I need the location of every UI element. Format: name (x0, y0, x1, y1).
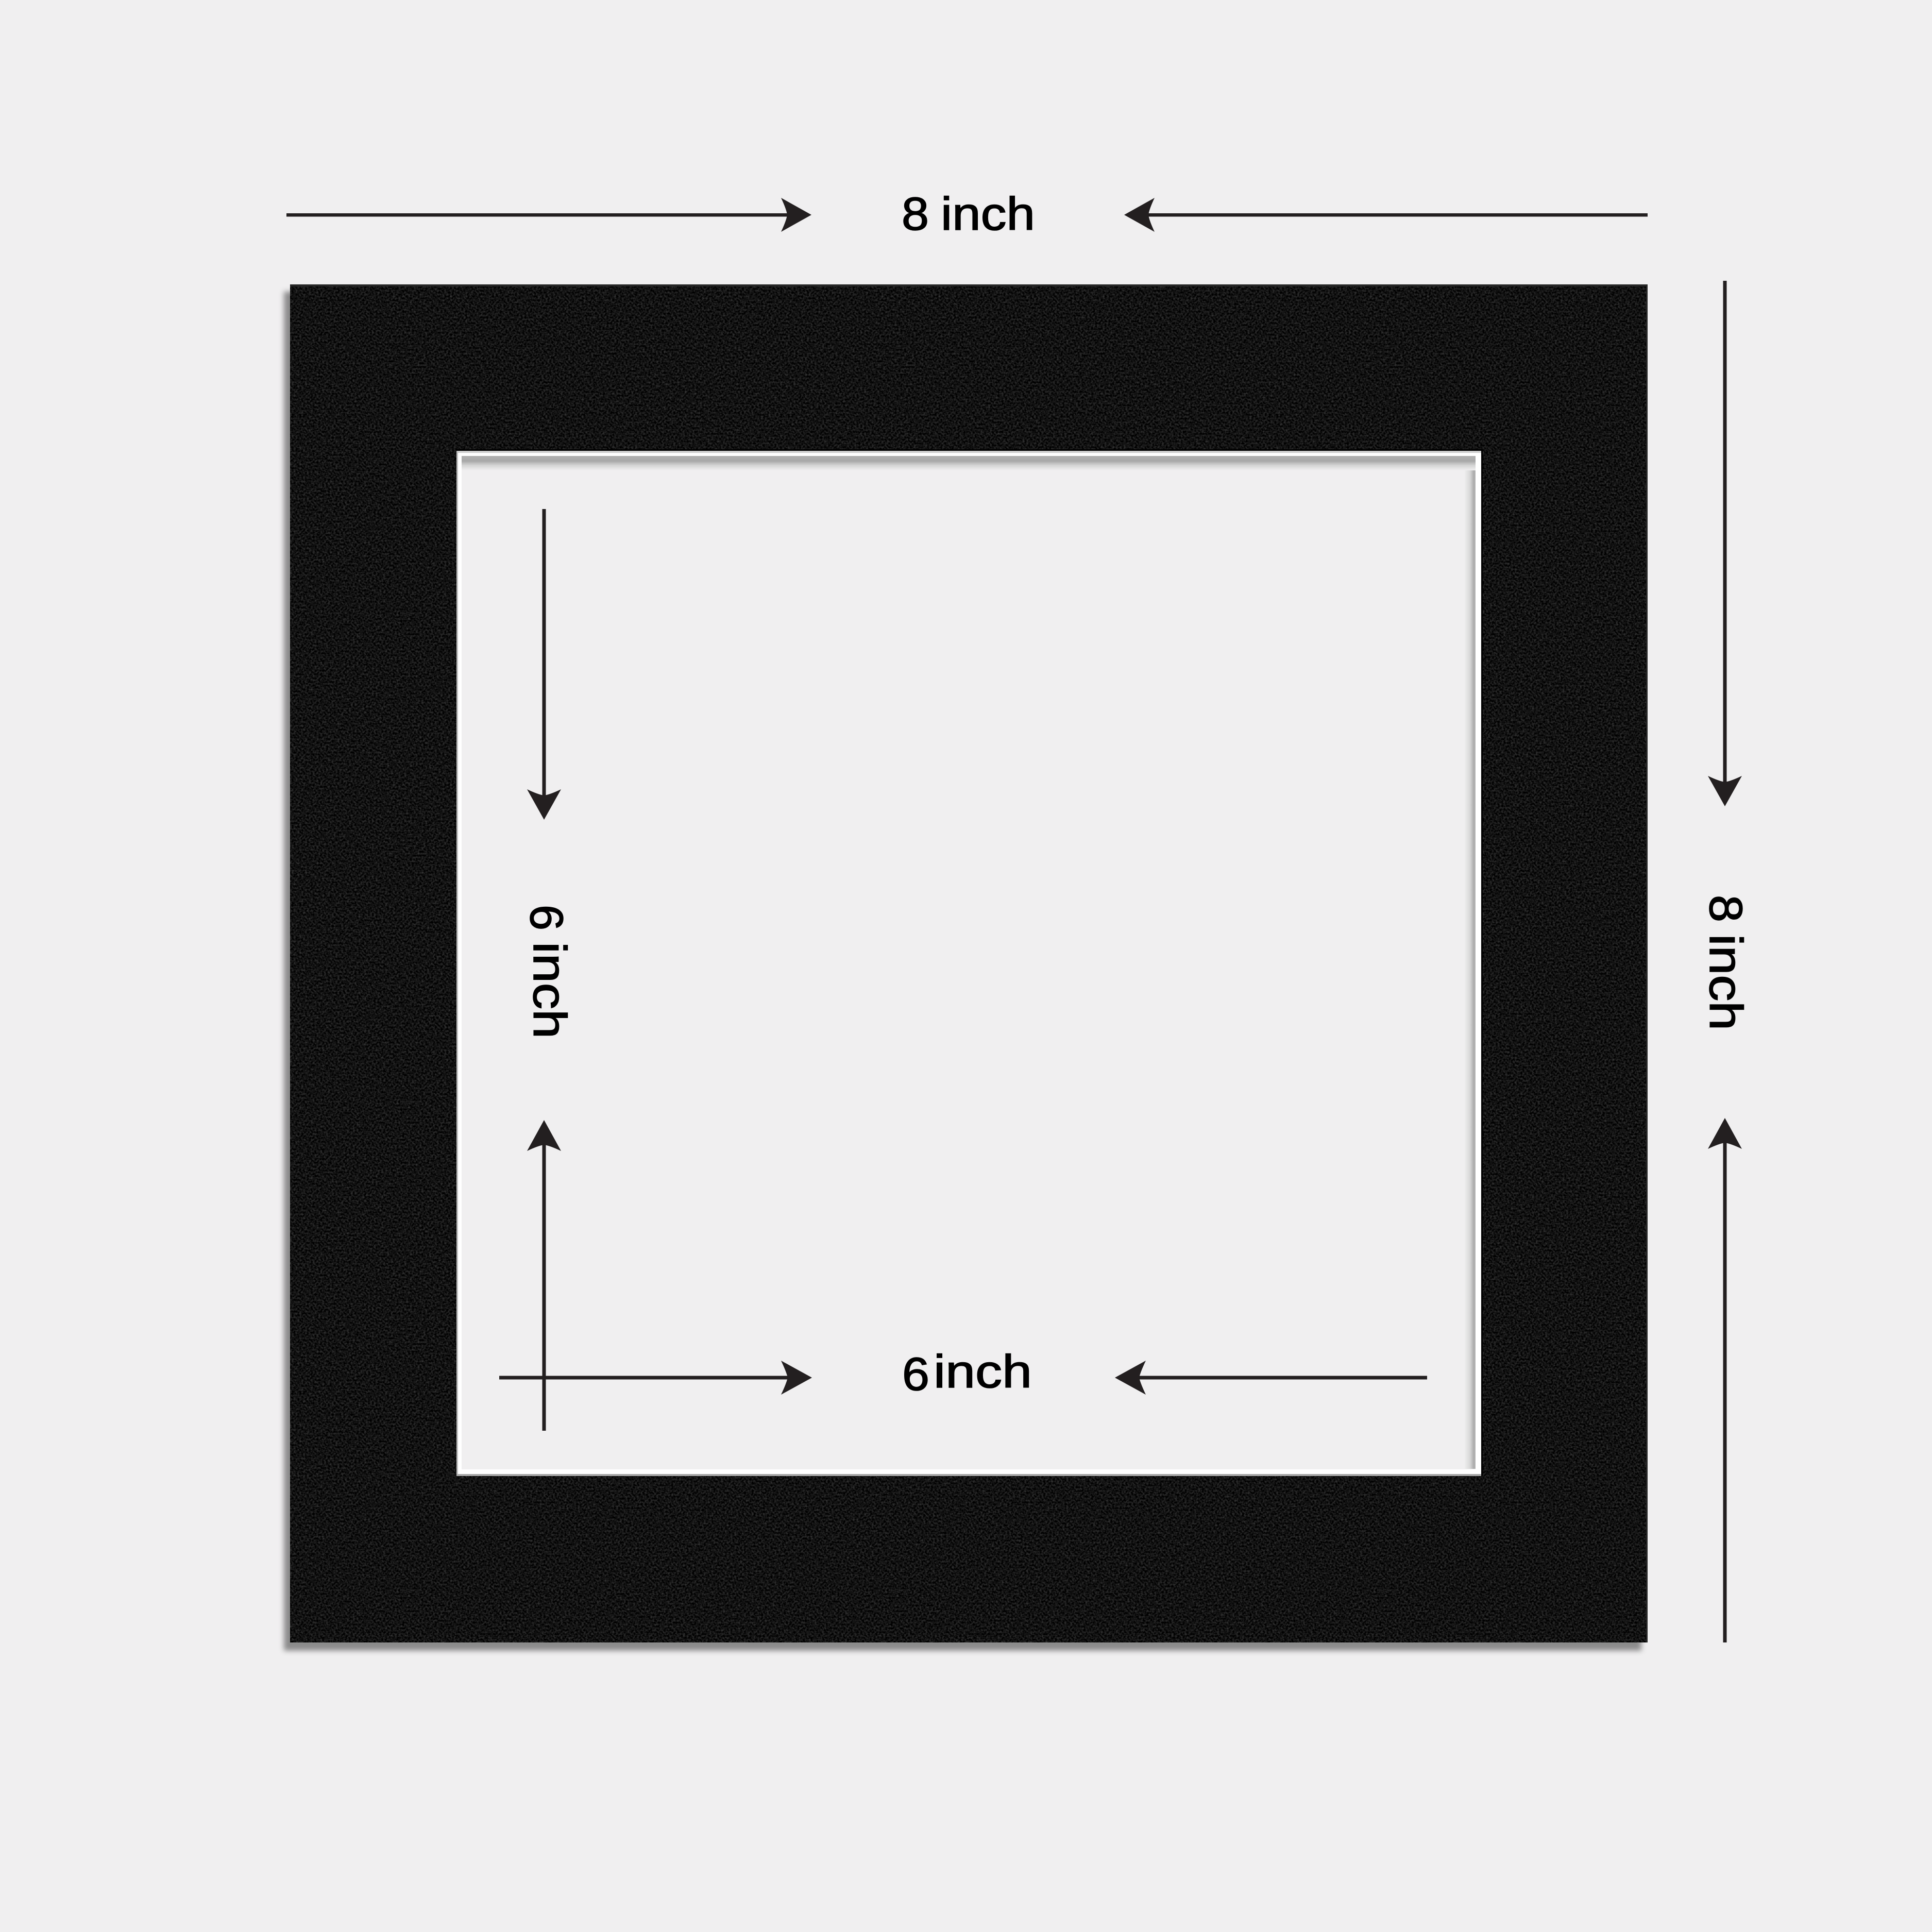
label: top 8 inch: inch (941, 189, 1035, 240)
label: top 8 inch (902, 189, 1035, 240)
arrow: inner height, pointing up (527, 1120, 561, 1431)
label: right 8 inch rotated: inch (1700, 934, 1751, 1030)
arrow: inner width, pointing right (499, 1361, 812, 1395)
mat drop shadow (284, 292, 1641, 1651)
label: bottom 6 inch: inch (934, 1346, 1032, 1398)
arrow: top width, pointing right (286, 198, 811, 232)
label: inner 6 inch rotated (520, 905, 575, 1039)
arrow: inner height, pointing down (527, 509, 561, 820)
label: bottom 6 inch: 6 (902, 1349, 929, 1400)
label: inner 6 inch rotated: 6 (520, 905, 572, 930)
label: right 8 inch rotated: 8 (1700, 895, 1751, 922)
white bevel (456, 451, 1481, 1476)
bevel left edge shade (456, 451, 458, 1476)
label: bottom 6 inch (902, 1346, 1032, 1400)
label: inner 6 inch rotated: inch (523, 942, 575, 1039)
opening background (453, 448, 1484, 1479)
label: top 8 inch: 8 (902, 189, 929, 240)
bevel bottom edge shade (456, 1474, 1481, 1476)
panel: black mat board with square opening (284, 284, 1648, 1651)
label: right 8 inch rotated (1700, 895, 1751, 1030)
arrow: right height, pointing down (1708, 281, 1742, 806)
opening top inner shadow (462, 456, 1476, 470)
arrow: top width, pointing left (1124, 198, 1648, 232)
arrow: inner width, pointing left (1115, 1361, 1427, 1395)
mat board surface (290, 284, 1648, 1642)
panel: mat opening with white bevel (456, 451, 1481, 1476)
arrow: right height, pointing up (1708, 1118, 1742, 1642)
opening right inner shadow (1464, 456, 1476, 1469)
bevel top edge shade (456, 451, 1481, 453)
